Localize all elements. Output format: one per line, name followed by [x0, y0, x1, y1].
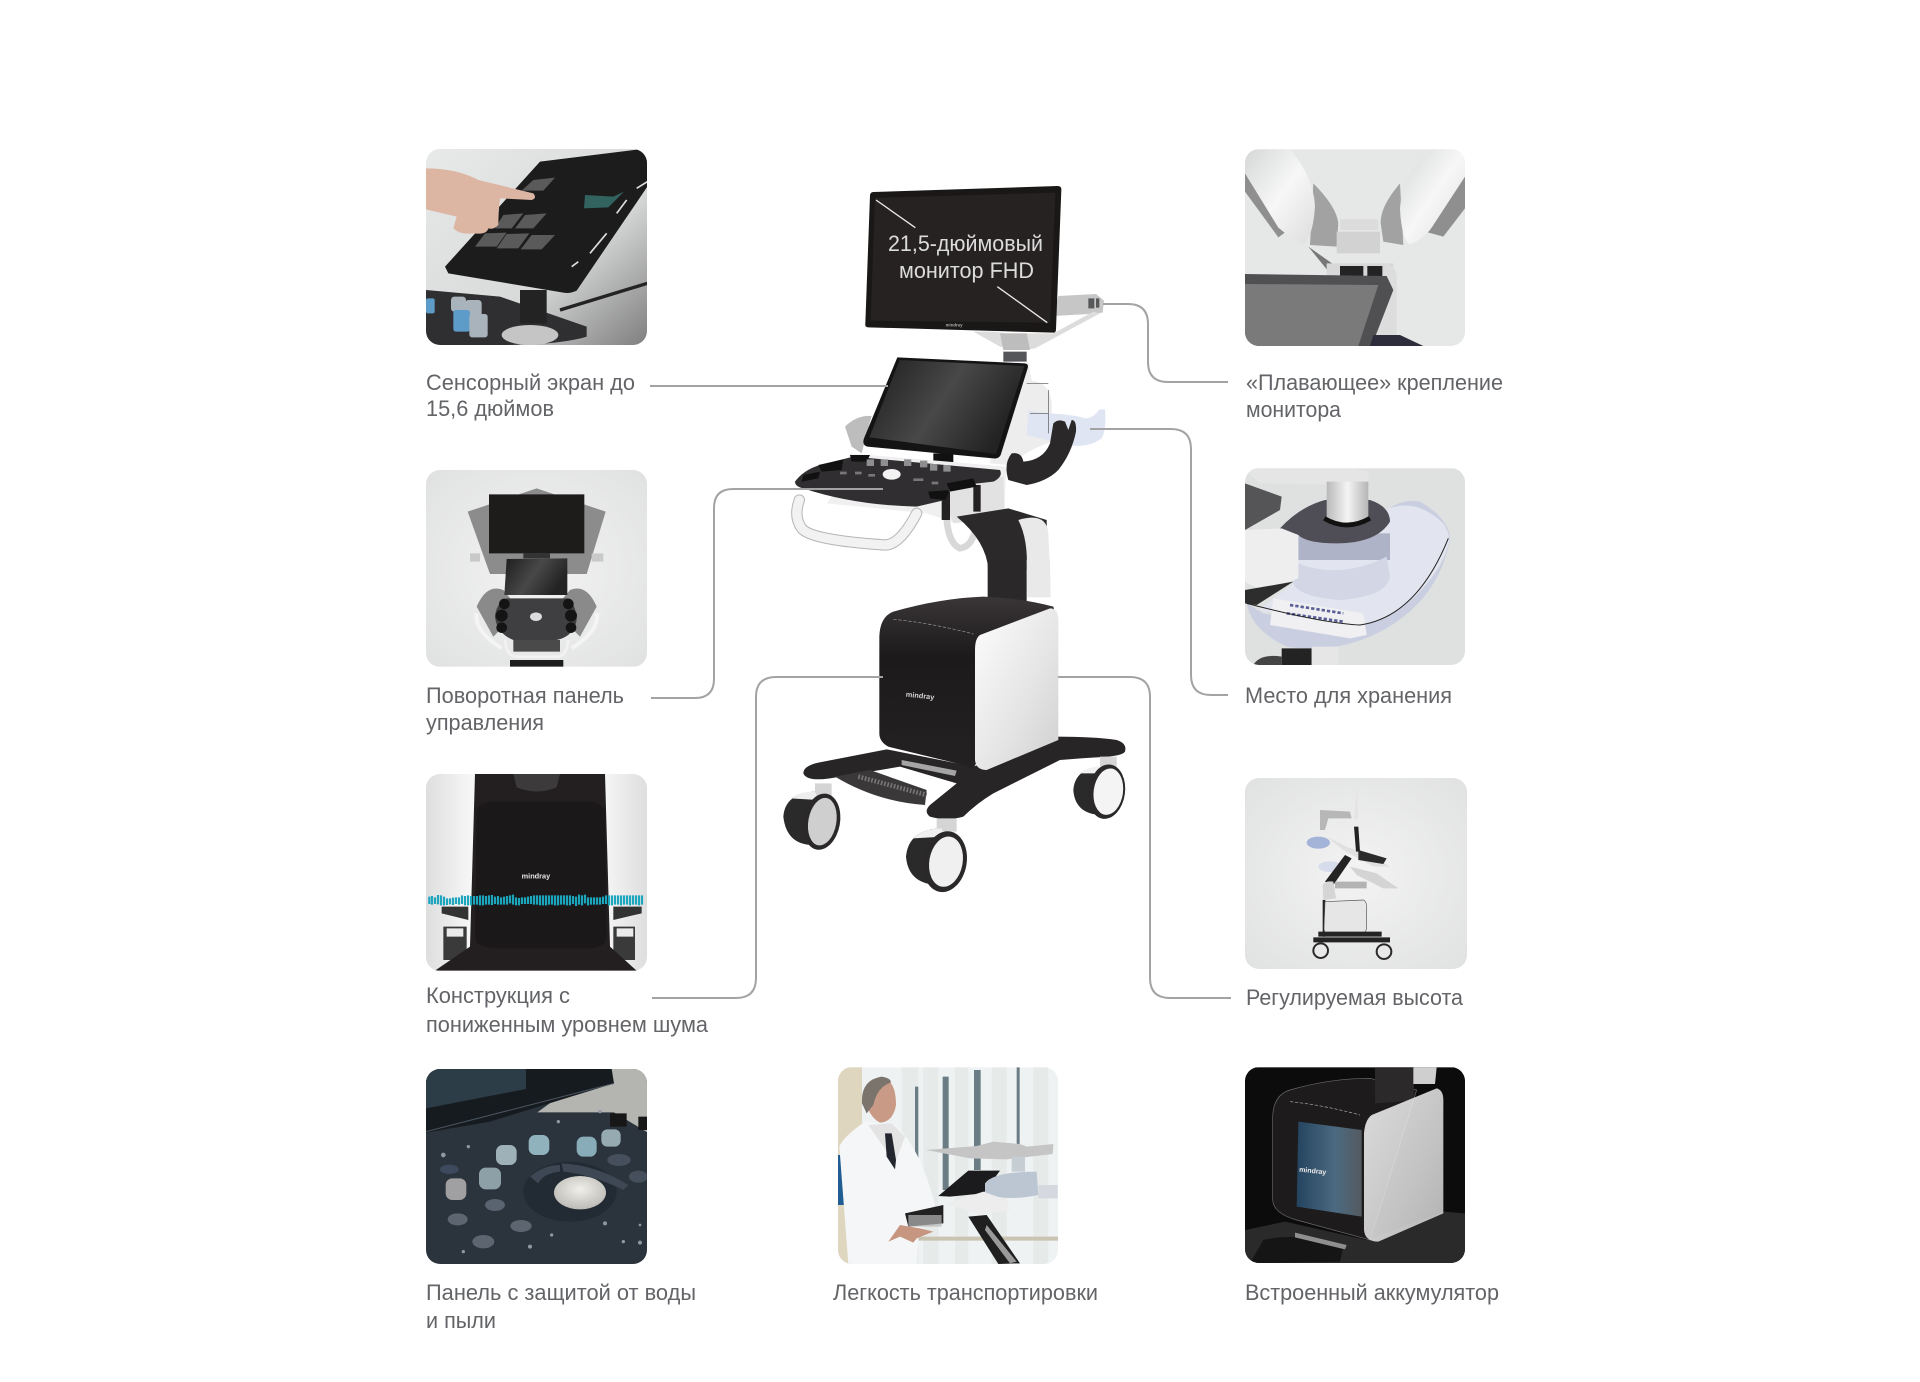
caption: rotating control panel: Поворотная панель — [426, 683, 624, 708]
caption: easy transport: Легкость транспортировки — [833, 1280, 1098, 1305]
photo: built-in battery — [1245, 1067, 1465, 1263]
storage tray — [1027, 383, 1105, 446]
connector: rotating panel — [651, 489, 883, 698]
caption: floating monitor mount — [1246, 370, 1503, 422]
water panel knobs — [440, 1129, 648, 1248]
caption: touch screen: Сенсорный экран до — [426, 370, 635, 395]
housing: mindray — [905, 690, 936, 702]
trackball — [523, 1162, 628, 1222]
caption: storage: Место для хранения — [1245, 683, 1452, 708]
photo: low noise design — [426, 774, 647, 971]
caption: floating monitor mount: «Плавающее» крепление — [1246, 370, 1503, 395]
caption: built-in battery: Встроенный аккумулятор — [1245, 1280, 1499, 1305]
doctor figure — [839, 1077, 935, 1264]
carried device — [905, 1142, 1058, 1264]
photo: storage tray — [1245, 468, 1465, 665]
monitor caption — [888, 231, 1043, 283]
connector: touch screen — [650, 385, 888, 387]
monitor — [865, 186, 1061, 333]
connector: adjustable height — [1058, 677, 1231, 998]
lower part: cart — [783, 560, 1129, 896]
caption: floating monitor mount: монитора — [1246, 397, 1342, 422]
control panel — [795, 455, 1001, 507]
diagonal highlight lines — [876, 200, 1047, 323]
white console base — [827, 453, 1007, 523]
lower arm — [957, 508, 1047, 570]
handle — [797, 500, 917, 545]
base — [803, 737, 1125, 819]
water drops — [441, 1110, 642, 1253]
monitor logo: mindray — [946, 323, 963, 328]
photo: touch screen — [426, 148, 647, 345]
caption: touch screen — [426, 370, 635, 421]
photo: floating monitor mount — [1245, 149, 1465, 346]
wheel front — [906, 818, 972, 896]
support column — [990, 362, 1053, 465]
white arm cover — [1018, 518, 1050, 570]
low noise photo logo: mindray — [522, 872, 551, 881]
tablet — [445, 148, 647, 293]
caption: touch screen: 15,6 дюймов — [426, 396, 554, 421]
caption: rotating control panel — [426, 683, 624, 735]
caption: adjustable height: Регулируемая высота — [1246, 985, 1464, 1010]
wheel back right — [1073, 757, 1129, 821]
connector: storage — [1090, 429, 1228, 695]
housing — [879, 597, 1058, 770]
knobs in photo — [426, 297, 488, 337]
infographic canvas — [426, 149, 1502, 1328]
central ultrasound system — [783, 186, 1129, 896]
monitor caption: монитор FHD — [899, 258, 1034, 283]
column — [988, 560, 1051, 603]
photo: doctor moving the system — [838, 1067, 1058, 1264]
connector: noise design — [652, 677, 883, 998]
hand — [426, 168, 535, 234]
photo: water-protected panel — [426, 1069, 648, 1264]
caption: water-protected panel: и пыли — [426, 1308, 496, 1333]
probe holder arm — [1006, 420, 1076, 485]
caption: low noise design: пониженным уровнем шума — [426, 1012, 709, 1037]
monitor arm — [973, 294, 1104, 362]
wheel back left — [783, 783, 845, 853]
caption: low noise design: Конструкция с — [426, 983, 570, 1008]
sound wave — [429, 895, 642, 906]
caption: rotating control panel: управления — [426, 710, 544, 735]
caption: low noise design — [426, 983, 709, 1037]
battery photo logo: mindray — [1299, 1167, 1327, 1177]
touch screen — [863, 357, 1028, 465]
photo: adjustable height — [1245, 778, 1467, 969]
caption: water-protected panel: Панель с защитой от воды — [426, 1280, 696, 1305]
caption: water-protected panel — [426, 1280, 696, 1333]
console base in photo — [426, 290, 587, 345]
upper part: monitors and console — [795, 186, 1105, 570]
probe holder left — [845, 416, 872, 453]
tube — [1270, 598, 1367, 638]
monitor caption: 21,5-дюймовый — [888, 231, 1043, 256]
tray bowl — [1247, 501, 1450, 649]
hooks and right cluster — [940, 477, 1005, 548]
connector: floating mount — [1103, 304, 1228, 382]
photo: rotating control panel — [426, 470, 647, 667]
